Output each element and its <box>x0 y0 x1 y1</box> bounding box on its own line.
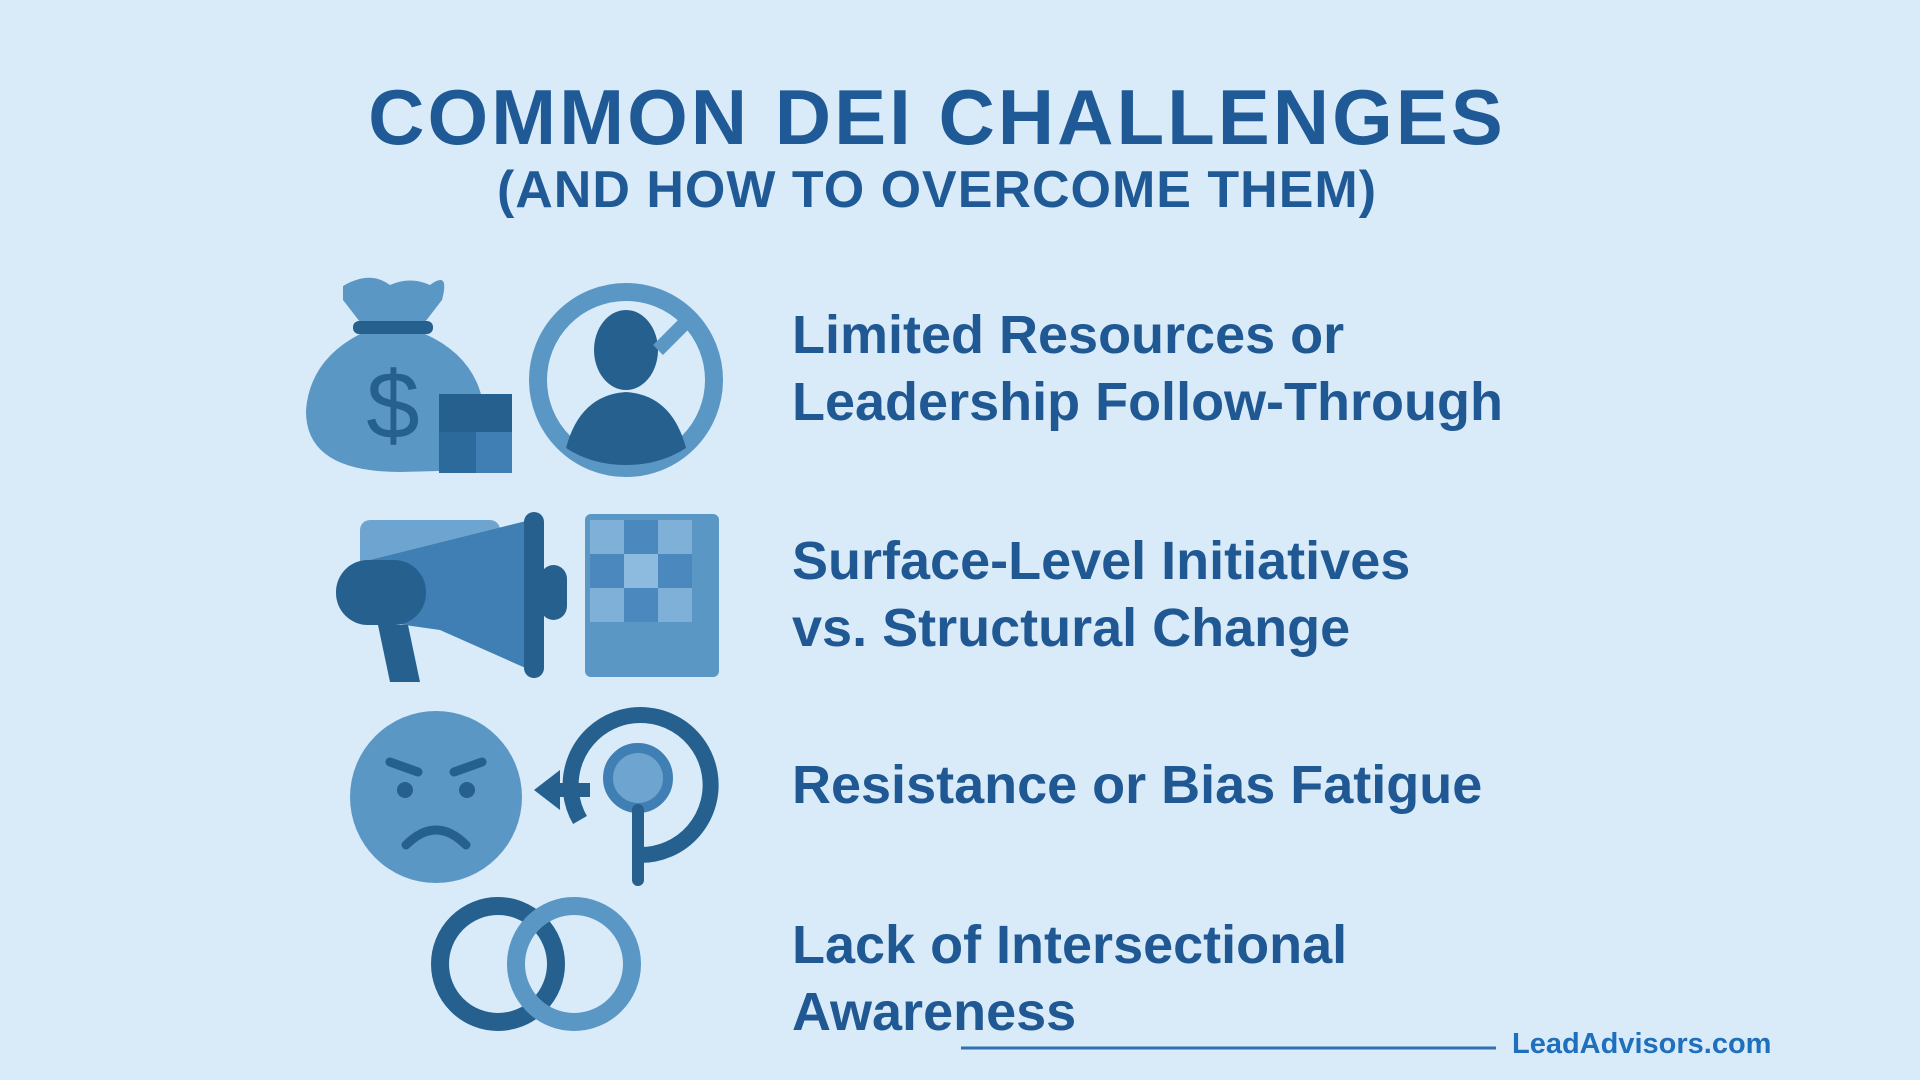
icon: money bag: $ <box>366 352 420 459</box>
icon: interlocking rings <box>440 906 632 1022</box>
footer: brand: LeadAdvisors.com <box>1512 1028 1771 1060</box>
text: challenge 4: Awareness <box>792 982 1076 1042</box>
footer line <box>961 1046 1496 1050</box>
icon: cycle with magnifier <box>534 715 711 880</box>
icon: money bag <box>306 278 512 473</box>
text: challenge 2: vs. Structural Change <box>792 598 1350 658</box>
icon: megaphone <box>336 512 567 682</box>
text: challenge 1: Leadership Follow-Through <box>792 372 1503 432</box>
icon: angry face <box>350 711 522 883</box>
text: challenge 2 <box>792 531 1410 658</box>
text: challenge 1 <box>792 305 1503 432</box>
subtitle: (AND HOW TO OVERCOME THEM) <box>497 161 1377 219</box>
text: challenge 3: Resistance or Bias Fatigue <box>792 755 1482 815</box>
text: challenge 1: Limited Resources or <box>792 305 1344 365</box>
icon: person crossed out <box>538 292 714 468</box>
text: challenge 2: Surface-Level Initiatives <box>792 531 1410 591</box>
text: challenge 4: Lack of Intersectional <box>792 915 1347 975</box>
icon: grid panel <box>585 514 719 677</box>
text: challenge 4 <box>792 915 1347 1042</box>
title: COMMON DEI CHALLENGES <box>368 73 1506 161</box>
